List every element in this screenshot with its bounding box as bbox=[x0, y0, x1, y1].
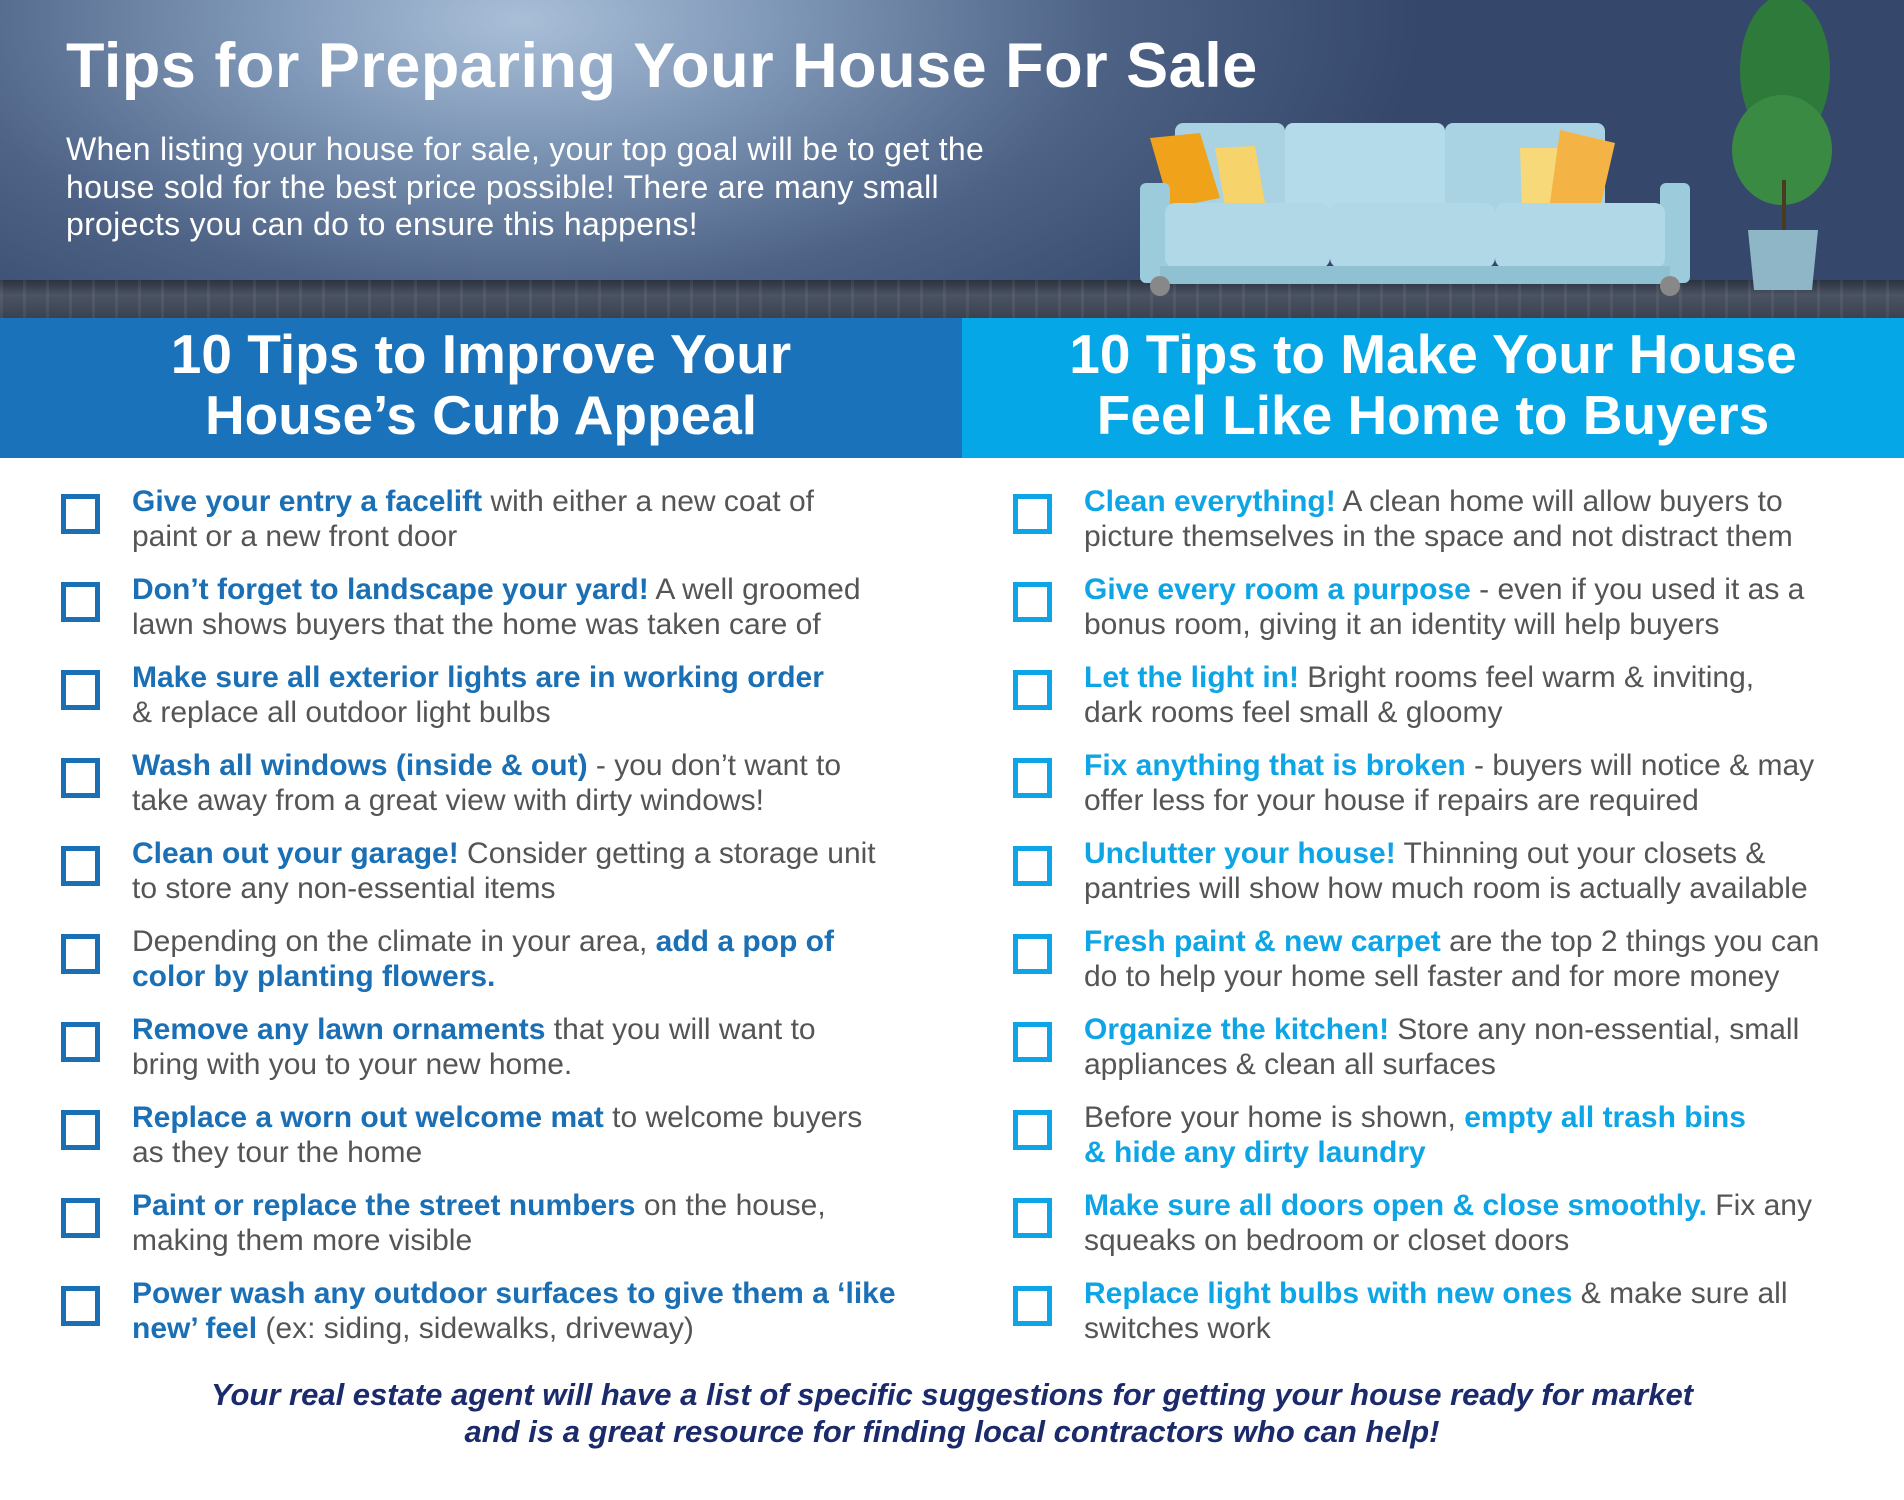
right checklist: do to help your home sell faster and for more money bbox=[1084, 960, 1779, 993]
right checklist: dark rooms feel small & gloomy bbox=[1084, 696, 1502, 729]
right checklist: Organize the kitchen! Store any non-essential, small bbox=[1084, 1013, 1799, 1046]
right checklist: Unclutter your house! Thinning out your closets & bbox=[1084, 837, 1765, 870]
left checklist: Depending on the climate in your area, add a pop of bbox=[132, 925, 834, 958]
column header: feel like home: Feel Like Home to Buyers bbox=[1097, 384, 1769, 446]
right checklist: picture themselves in the space and not distract them bbox=[1084, 520, 1793, 553]
column header: curb appeal: House’s Curb Appeal bbox=[205, 384, 757, 446]
item bbox=[61, 749, 841, 817]
subtitle bbox=[66, 131, 984, 242]
left checklist: color by planting flowers. bbox=[132, 960, 495, 993]
left checklist: lawn shows buyers that the home was taken care of bbox=[132, 608, 821, 641]
item bbox=[1013, 749, 1814, 817]
illustration: sofa bbox=[1140, 123, 1690, 296]
right checklist: Replace light bulbs with new ones & make sure all bbox=[1084, 1277, 1788, 1310]
footer note bbox=[211, 1377, 1694, 1449]
title: Tips for Preparing Your House For Sale bbox=[66, 31, 1258, 101]
column header: curb appeal bbox=[0, 318, 962, 458]
left checklist: new’ feel (ex: siding, sidewalks, driveway) bbox=[132, 1312, 694, 1345]
left checklist: Replace a worn out welcome mat to welcome buyers bbox=[132, 1101, 862, 1134]
left checklist: Power wash any outdoor surfaces to give them a ‘like bbox=[132, 1277, 896, 1310]
right checklist: Fix anything that is broken - buyers will notice & may bbox=[1084, 749, 1814, 782]
item bbox=[61, 925, 834, 993]
item bbox=[61, 661, 824, 729]
left checklist: Don’t forget to landscape your yard! A well groomed bbox=[132, 573, 861, 606]
right checklist: Give every room a purpose - even if you used it as a bbox=[1084, 573, 1804, 606]
right checklist: Make sure all doors open & close smoothly. Fix any bbox=[1084, 1189, 1812, 1222]
column header: curb appeal: 10 Tips to Improve Your bbox=[171, 323, 791, 385]
right checklist: pantries will show how much room is actually available bbox=[1084, 872, 1808, 905]
left checklist: bring with you to your new home. bbox=[132, 1048, 572, 1081]
right checklist bbox=[1013, 485, 1819, 1345]
right checklist: offer less for your house if repairs are required bbox=[1084, 784, 1699, 817]
item bbox=[61, 485, 814, 553]
left checklist: take away from a great view with dirty windows! bbox=[132, 784, 764, 817]
item bbox=[61, 837, 876, 905]
item bbox=[1013, 837, 1808, 905]
footer note: and is a great resource for finding local contractors who can help! bbox=[464, 1414, 1439, 1449]
left checklist: Remove any lawn ornaments that you will want to bbox=[132, 1013, 816, 1046]
right checklist: bonus room, giving it an identity will help buyers bbox=[1084, 608, 1719, 641]
item bbox=[1013, 1101, 1746, 1169]
item bbox=[1013, 661, 1754, 729]
right checklist: Before your home is shown, empty all trash bins bbox=[1084, 1101, 1746, 1134]
right checklist: switches work bbox=[1084, 1312, 1271, 1345]
left checklist: to store any non-essential items bbox=[132, 872, 556, 905]
column header: feel like home bbox=[962, 318, 1904, 458]
right checklist: Let the light in! Bright rooms feel warm & inviting, bbox=[1084, 661, 1754, 694]
left checklist: making them more visible bbox=[132, 1224, 472, 1257]
subtitle: projects you can do to ensure this happens! bbox=[66, 206, 698, 242]
left checklist: Wash all windows (inside & out) - you don’t want to bbox=[132, 749, 841, 782]
left checklist: Paint or replace the street numbers on the house, bbox=[132, 1189, 826, 1222]
right checklist: squeaks on bedroom or closet doors bbox=[1084, 1224, 1569, 1257]
item bbox=[61, 573, 861, 641]
item bbox=[61, 1101, 862, 1169]
right checklist: Fresh paint & new carpet are the top 2 things you can bbox=[1084, 925, 1819, 958]
item bbox=[1013, 485, 1793, 553]
left checklist: & replace all outdoor light bulbs bbox=[132, 696, 551, 729]
left checklist: Make sure all exterior lights are in working order bbox=[132, 661, 824, 694]
left checklist: as they tour the home bbox=[132, 1136, 422, 1169]
left checklist: Give your entry a facelift with either a new coat of bbox=[132, 485, 814, 518]
subtitle: house sold for the best price possible! There are many small bbox=[66, 168, 939, 204]
left checklist bbox=[61, 485, 896, 1345]
footer note: Your real estate agent will have a list of specific suggestions for getting your house ready for market bbox=[211, 1377, 1693, 1412]
left checklist: paint or a new front door bbox=[132, 520, 457, 553]
item bbox=[61, 1013, 816, 1081]
item bbox=[1013, 1189, 1812, 1257]
right checklist: Clean everything! A clean home will allow buyers to bbox=[1084, 485, 1783, 518]
left checklist: Clean out your garage! Consider getting a storage unit bbox=[132, 837, 876, 870]
item bbox=[1013, 1277, 1788, 1345]
right checklist: & hide any dirty laundry bbox=[1084, 1136, 1426, 1169]
header banner bbox=[0, 0, 1904, 318]
item bbox=[61, 1189, 826, 1257]
column header: feel like home: 10 Tips to Make Your House bbox=[1069, 323, 1797, 385]
item bbox=[1013, 1013, 1799, 1081]
item bbox=[1013, 925, 1819, 993]
subtitle: When listing your house for sale, your top goal will be to get the bbox=[66, 131, 984, 167]
item bbox=[61, 1277, 896, 1345]
item bbox=[1013, 573, 1804, 641]
right checklist: appliances & clean all surfaces bbox=[1084, 1048, 1496, 1081]
illustration: plant bbox=[1732, 0, 1832, 290]
